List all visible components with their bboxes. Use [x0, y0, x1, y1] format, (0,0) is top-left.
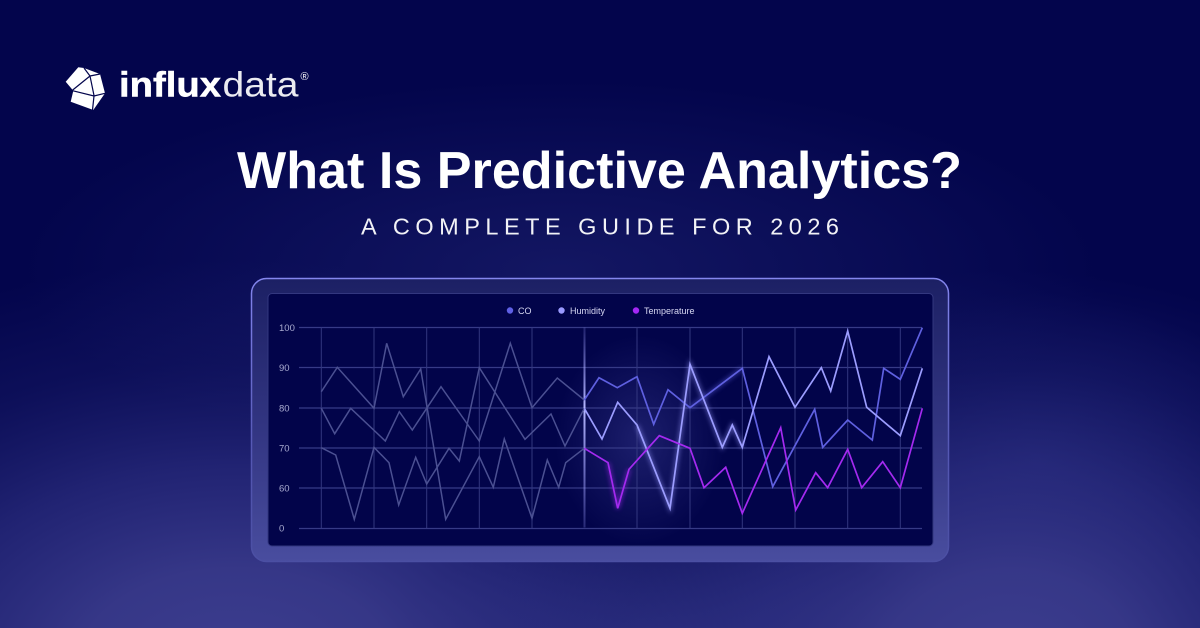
y axis labels: 70	[279, 444, 290, 454]
legend: Humidity: Humidity	[570, 306, 606, 316]
series: CO	[584, 328, 922, 487]
wordmark: influx: influx	[119, 66, 222, 104]
series: Temperature	[584, 408, 922, 513]
registered mark: ®	[300, 71, 309, 83]
panel: chart area	[268, 294, 933, 546]
logo: influxdata	[66, 66, 309, 110]
panel: dashboard frame	[252, 278, 948, 562]
legend: Temperature: Temperature	[644, 306, 695, 316]
line glow: highlighted segment	[608, 364, 742, 508]
subtitle: A COMPLETE GUIDE FOR 2026	[361, 214, 839, 240]
highlight glow behind chart	[555, 335, 725, 545]
y axis labels	[279, 323, 295, 534]
y axis labels: 100	[279, 323, 295, 334]
icon: cube polyhedron	[66, 67, 105, 110]
legend: CO: CO	[518, 306, 532, 316]
wordmark: data: data	[222, 66, 299, 104]
y axis labels: 80	[279, 404, 290, 414]
legend: CO	[507, 306, 532, 316]
y axis labels: 60	[279, 484, 290, 494]
series: Humidity	[584, 331, 922, 508]
chart grid	[299, 328, 922, 528]
chart legend	[507, 306, 695, 316]
cursor line	[584, 328, 586, 528]
y axis labels: 90	[279, 363, 290, 374]
y axis labels: 0	[279, 524, 284, 534]
historical grey series	[321, 343, 584, 519]
title: What Is Predictive Analytics?	[237, 142, 962, 200]
